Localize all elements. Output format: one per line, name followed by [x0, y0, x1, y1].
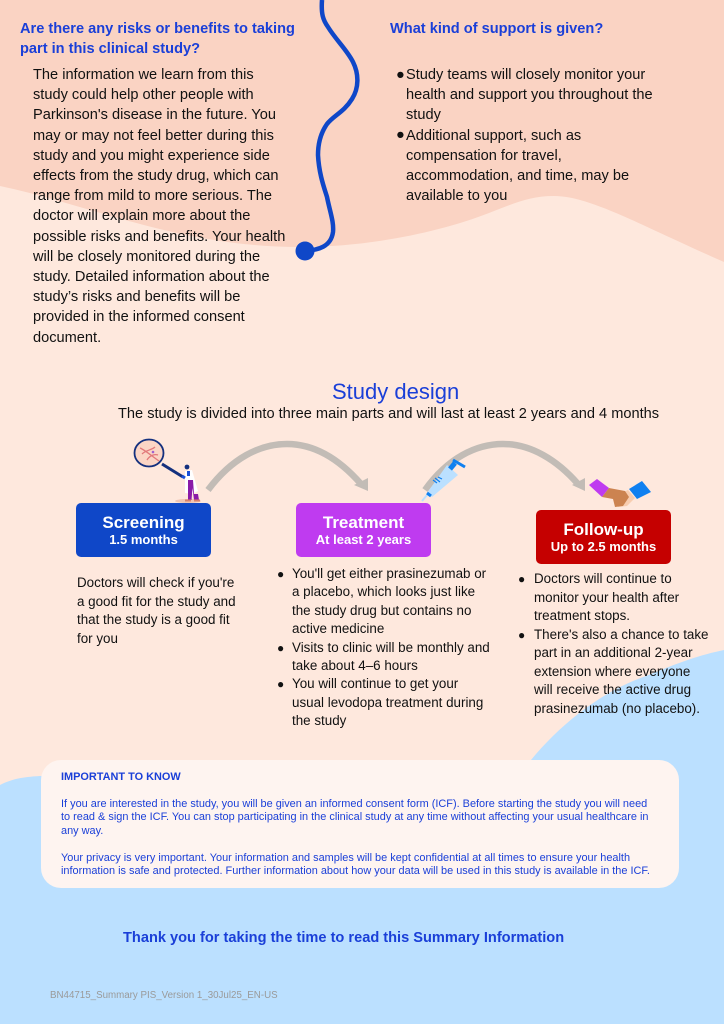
text: treatment description: Visits to clinic will be monthly and	[292, 640, 490, 655]
text: treatment description: ●	[277, 677, 284, 691]
text block: support: available to you	[406, 188, 507, 204]
text: follow-up description: treatment stops.	[534, 608, 630, 623]
box: follow-up: Up to 2.5 months	[551, 539, 656, 554]
box: treatment	[296, 503, 431, 557]
icon: syringe	[421, 458, 466, 502]
important text: If you are interested in the study, you will be given an informed consent form (ICF). Before starting the study you will need	[61, 798, 647, 810]
text block: risks and benefits: study. Detailed information about the	[33, 269, 270, 285]
text: treatment description: the study	[292, 713, 346, 728]
text: follow-up description: will receive the active drug	[534, 682, 691, 697]
text block: risks and benefits: document.	[33, 330, 101, 346]
icon: handshake	[589, 479, 651, 507]
text: screening description: a good fit for the study and	[77, 594, 236, 608]
text: follow-up description: extension where everyone	[534, 664, 690, 678]
text block: risks and benefits	[33, 67, 285, 346]
text: follow-up description: monitor your health after	[534, 590, 679, 604]
text: follow-up description: prasinezumab (no placebo).	[534, 700, 700, 716]
text block: support: compensation for travel,	[406, 148, 562, 164]
footer reference: BN44715_Summary PIS_Version 1_30Jul25_EN-US	[50, 990, 278, 1001]
text block: risks and benefits: range from mild to more serious. The	[33, 188, 272, 204]
box: treatment: Treatment	[323, 513, 404, 532]
text: treatment description: You'll get either prasinezumab or	[292, 566, 486, 581]
text: treatment description: ●	[277, 641, 284, 655]
text: treatment description: You will continue to get your	[292, 676, 458, 691]
text: treatment description: ●	[277, 567, 284, 581]
text block: support: ●	[396, 127, 405, 143]
text block: support: health and support you throughout the	[406, 87, 653, 103]
text: screening description: for you	[77, 630, 118, 646]
arrow: treatment to follow-up	[422, 440, 585, 492]
heading: support: What kind of support is given?	[390, 21, 603, 37]
text: treatment description: active medicine	[292, 621, 384, 636]
text block: risks and benefits: study could help other people with	[33, 87, 254, 103]
box: treatment: At least 2 years	[316, 532, 411, 547]
box: follow-up	[536, 510, 671, 564]
text: follow-up description: part in an additional 2-year	[534, 645, 693, 660]
panel: important to know	[41, 760, 679, 888]
text block: support: ●	[396, 67, 405, 83]
important text: to read & sign the ICF. You can stop participating in the clinical study at any time without affecting your usual healthcare in	[61, 811, 648, 823]
icon: doctor with magnifying glass	[134, 438, 201, 503]
text block: risks and benefits: possible risks and benefits. Your health	[33, 229, 285, 245]
arrow: screening to treatment	[206, 440, 368, 492]
thank you message: Thank you for taking the time to read this Summary Information	[123, 930, 564, 946]
box: screening	[76, 503, 211, 557]
icon: winding line with dot	[296, 0, 360, 260]
text: treatment description: take about 4–6 hours	[292, 658, 418, 673]
important text	[61, 798, 650, 877]
text: treatment description: the study drug but contains no	[292, 603, 471, 618]
text block: support: Additional support, such as	[406, 128, 581, 144]
text: follow-up description: Doctors will continue to	[534, 571, 672, 586]
text: treatment description: a placebo, which looks just like	[292, 584, 475, 599]
text: treatment description	[277, 566, 490, 728]
text block: risks and benefits: The information we learn from this	[33, 67, 254, 83]
text block: risks and benefits: study and you might experience side	[33, 148, 270, 164]
text block: risks and benefits: study’s risks and benefits will be	[33, 289, 240, 305]
text: screening description: Doctors will check if you're	[77, 575, 234, 590]
text block: risks and benefits: Parkinson's disease in the future. You	[33, 107, 276, 123]
text: follow-up description: There's also a chance to take	[534, 626, 709, 642]
text block: support: accommodation, and time, may be	[406, 168, 629, 184]
text block: support	[396, 67, 653, 204]
heading: risks and benefits: part in this clinical study?	[20, 41, 200, 57]
text block: risks and benefits: provided in the informed consent	[33, 309, 245, 325]
important heading: IMPORTANT TO KNOW	[61, 771, 181, 783]
heading: study design: Study design	[332, 379, 459, 404]
text block: support: study	[406, 107, 441, 123]
text: follow-up description: ●	[518, 572, 525, 586]
text block: risks and benefits: doctor will explain more about the	[33, 208, 250, 224]
text: screening description	[77, 575, 236, 646]
heading: risks and benefits	[20, 21, 295, 57]
text: treatment description: usual levodopa treatment during	[292, 695, 483, 710]
text block: risks and benefits: effects from the study drug, which can	[33, 168, 279, 184]
box: screening: 1.5 months	[109, 532, 178, 547]
box: follow-up: Follow-up	[563, 520, 644, 539]
important text: Your privacy is very important. Your information and samples will be kept confidential at all times to ensure your health	[61, 852, 630, 864]
text block: risks and benefits: will be closely monitored during the	[33, 249, 260, 265]
subtitle: The study is divided into three main parts and will last at least 2 years and 4 months	[118, 406, 659, 422]
text block: support: Study teams will closely monitor your	[406, 67, 645, 83]
text: screening description: that the study is a good fit	[77, 612, 230, 627]
text: follow-up description: ●	[518, 628, 525, 642]
text: follow-up description	[518, 571, 709, 716]
heading: risks and benefits: Are there any risks or benefits to taking	[20, 21, 295, 37]
important text: any way.	[61, 825, 103, 837]
box: screening: Screening	[102, 513, 185, 532]
important text: information is safe and protected. Further information about how your data will be used in this study is available in the ICF.	[61, 865, 650, 877]
text block: risks and benefits: may or may not feel better during this	[33, 128, 274, 144]
